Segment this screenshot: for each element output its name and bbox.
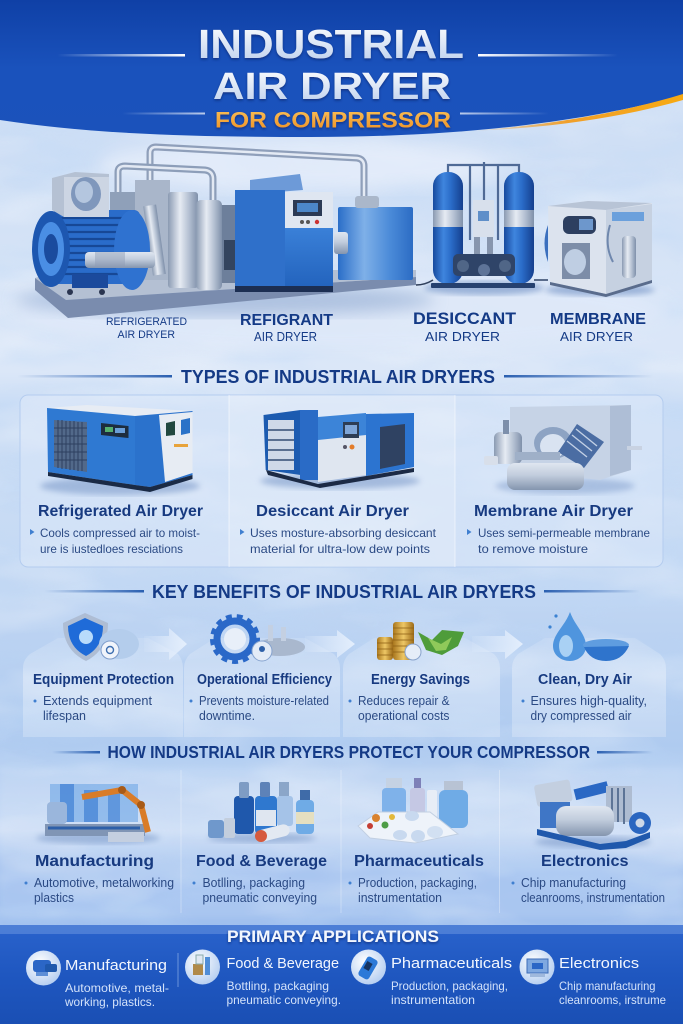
icon: electronics compressor xyxy=(534,779,651,850)
text: benefit clean dry air: dry compressed air xyxy=(530,709,632,723)
text: membrane: Membrane Air Dryer xyxy=(474,503,633,520)
icon: footer food and beverage xyxy=(185,950,220,984)
icon: footer manufacturing xyxy=(26,950,61,986)
control cabinet xyxy=(235,174,333,292)
hero labels xyxy=(106,309,646,344)
text: footer pharmaceuticals: Production, packaging, xyxy=(391,979,508,993)
text: pharmaceuticals: Production, packaging, xyxy=(358,876,477,890)
text: electronics xyxy=(512,853,665,905)
text: food and beverage xyxy=(192,853,327,905)
text: membrane: Uses semi-permeable membrane xyxy=(478,526,650,540)
hero labels: DESICCANT xyxy=(413,309,517,328)
header banner xyxy=(0,0,683,137)
arrow 2 xyxy=(305,630,355,658)
panel: industries xyxy=(0,768,683,918)
card: desiccant dryer xyxy=(260,410,420,489)
title: INDUSTRIAL xyxy=(198,21,464,67)
icon: coins and green arrow xyxy=(377,622,464,660)
text: desiccant: Desiccant Air Dryer xyxy=(256,503,409,520)
text: refrigerated xyxy=(30,503,203,556)
card: membrane dryer xyxy=(484,405,642,494)
arrow 1 xyxy=(144,628,187,660)
text: electronics: Electronics xyxy=(541,853,629,870)
text: electronics: Chip manufacturing xyxy=(521,876,626,890)
text: pharmaceuticals xyxy=(348,853,484,905)
text: benefit energy savings: Energy Savings xyxy=(371,672,470,688)
text: footer manufacturing: Manufacturing xyxy=(65,958,167,974)
text: desiccant: material for ultra-low dew points xyxy=(250,542,430,556)
text: benefit operational efficiency: Operational Efficiency xyxy=(197,672,332,688)
icon: food and beverage bottles xyxy=(208,782,316,843)
text: benefit operational efficiency: downtime. xyxy=(199,709,255,723)
text: benefit equipment protection: Extends equipment xyxy=(43,694,153,708)
hero: desiccant twin towers xyxy=(416,162,544,295)
icon: water drop and dish xyxy=(548,612,629,661)
hero labels: AIR DRYER xyxy=(254,330,317,344)
text: refrigerated: Cools compressed air to moist- xyxy=(40,526,200,540)
footer heading: PRIMARY APPLICATIONS xyxy=(227,928,439,946)
text: footer pharmaceuticals: Pharmaceuticals xyxy=(391,956,512,972)
text: footer food and beverage: Food & Beverage xyxy=(226,956,339,972)
heading: how dryers protect: HOW INDUSTRIAL AIR DRYERS PROTECT YOUR COMPRESSOR xyxy=(108,742,590,762)
card: refrigerated dryer xyxy=(40,405,200,495)
text: desiccant: Uses mosture-absorbing desiccant xyxy=(250,526,437,540)
text: pharmaceuticals: instrumentation xyxy=(358,891,442,905)
text: food and beverage: Food & Beverage xyxy=(196,853,327,870)
text: manufacturing: Automotive, metalworking xyxy=(34,876,174,890)
text: footer electronics xyxy=(559,956,666,1007)
heading: benefits: KEY BENEFITS OF INDUSTRIAL AIR DRYERS xyxy=(152,582,536,602)
text: footer manufacturing xyxy=(64,958,169,1009)
text: benefit equipment protection: lifespan xyxy=(43,709,86,723)
title: AIR DRYER xyxy=(213,66,451,108)
text: footer food and beverage: Bottling, packaging xyxy=(226,979,329,993)
text: benefit equipment protection: Equipment Protection xyxy=(33,672,174,688)
text: membrane xyxy=(467,503,650,556)
text: benefit energy savings xyxy=(348,672,470,723)
text: benefit clean dry air: Ensures high-quality, xyxy=(530,694,647,708)
text: benefit energy savings: operational costs xyxy=(358,709,450,723)
hero labels: REFIGRANT xyxy=(240,312,334,329)
text: benefit operational efficiency xyxy=(190,672,332,723)
text: benefit clean dry air xyxy=(522,672,647,723)
text: footer food and beverage: pneumatic conveying. xyxy=(226,993,341,1007)
receiver tank xyxy=(334,196,413,280)
text: manufacturing xyxy=(24,853,174,905)
arrow 3 xyxy=(472,630,523,659)
text: footer electronics: cleanrooms, irstrume xyxy=(559,993,666,1007)
text: footer electronics: Electronics xyxy=(559,956,639,972)
icon: shield xyxy=(63,613,139,661)
hero labels: REFRIGERATED xyxy=(106,316,187,328)
text: footer manufacturing: working, plastics. xyxy=(64,995,155,1009)
hero: main compressor system xyxy=(15,147,435,318)
icon: gear xyxy=(212,616,305,662)
text: benefit operational efficiency: Prevents moisture-related xyxy=(199,694,329,708)
text: footer electronics: Chip manufacturing xyxy=(559,979,656,993)
footer band: primary applications xyxy=(0,925,683,1024)
icon: manufacturing robot line xyxy=(36,784,160,844)
text: food and beverage: Botlling, packaging xyxy=(202,876,305,890)
hero labels: AIR DRYER xyxy=(118,329,175,341)
text: manufacturing: plastics xyxy=(34,891,74,905)
text: refrigerated: ure is iustedloes resciations xyxy=(40,542,183,556)
text: membrane: to remove moisture xyxy=(478,542,588,556)
title: FOR COMPRESSOR xyxy=(215,108,451,132)
panel: dryer types xyxy=(20,395,663,567)
text: food and beverage: pneumatic conveying xyxy=(202,891,317,905)
text: benefit clean dry air: Clean, Dry Air xyxy=(538,672,632,688)
hero labels: AIR DRYER xyxy=(560,329,633,344)
text: footer manufacturing: Automotive, metal- xyxy=(65,981,169,995)
text: footer pharmaceuticals xyxy=(391,956,512,1007)
cooling fan box xyxy=(52,172,109,217)
text: footer food and beverage xyxy=(226,956,341,1007)
icon: footer pharmaceuticals xyxy=(351,950,386,984)
text: electronics: cleanrooms, instrumentation xyxy=(521,891,665,905)
text: benefit equipment protection xyxy=(33,672,174,723)
text: desiccant xyxy=(240,503,437,556)
text: pharmaceuticals: Pharmaceuticals xyxy=(354,853,484,870)
title xyxy=(57,21,618,132)
text: footer pharmaceuticals: instrumentation xyxy=(391,993,475,1007)
hero labels: AIR DRYER xyxy=(425,329,500,344)
text: refrigerated: Refrigerated Air Dryer xyxy=(38,503,203,520)
heading: types: TYPES OF INDUSTRIAL AIR DRYERS xyxy=(181,367,495,387)
benefit cards xyxy=(23,638,666,737)
text: manufacturing: Manufacturing xyxy=(35,853,154,870)
text: benefit energy savings: Reduces repair & xyxy=(358,694,450,708)
hero: membrane unit xyxy=(534,201,655,297)
hero labels: MEMBRANE xyxy=(550,311,646,328)
motor xyxy=(32,210,155,295)
icon: pharmaceuticals xyxy=(358,778,468,843)
icon: footer electronics xyxy=(520,950,554,984)
